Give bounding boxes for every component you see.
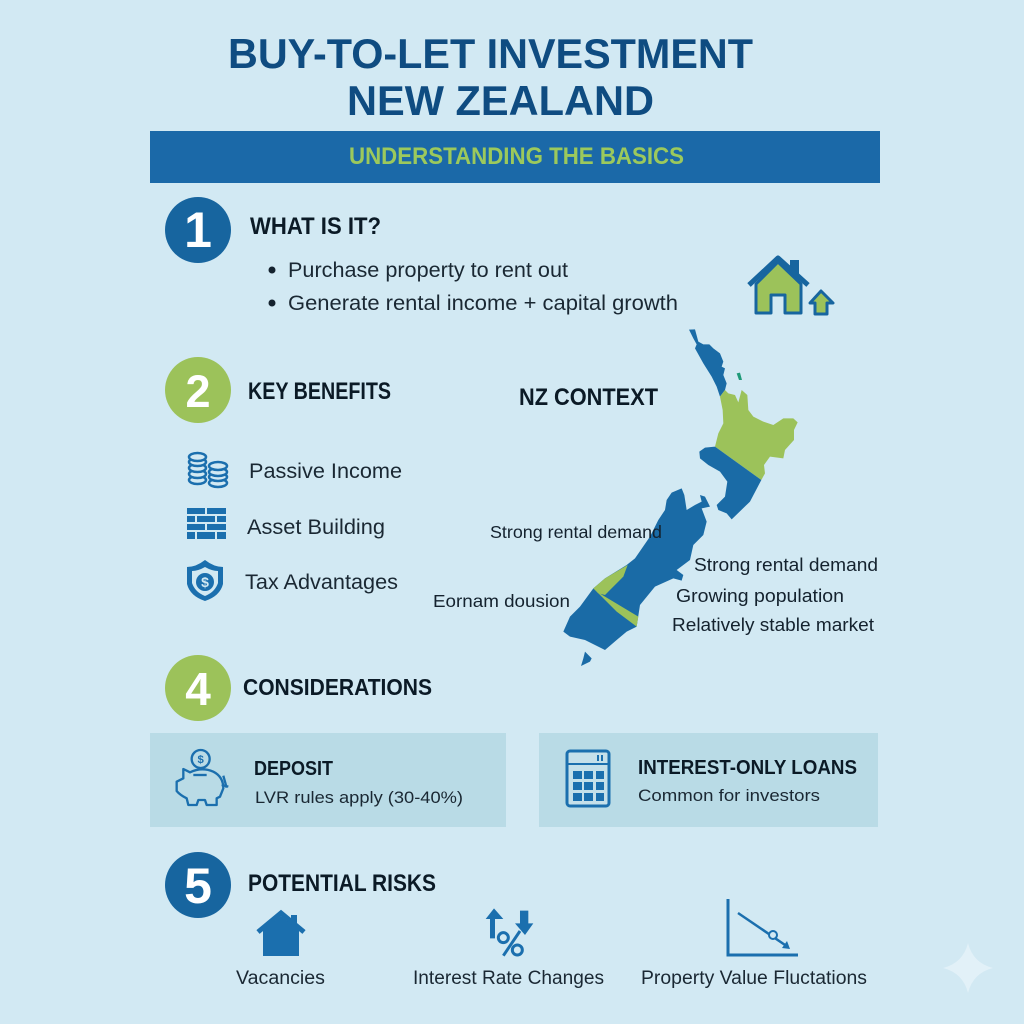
icon: declining line chart <box>728 899 798 955</box>
icon: calculator <box>567 751 609 806</box>
bullet list: Generate rental income + capital growth <box>288 292 678 315</box>
icon: brick wall <box>187 508 226 539</box>
Stewart Island <box>581 652 592 666</box>
benefit: passive income: Passive Income <box>249 460 402 483</box>
icon: house <box>258 913 304 956</box>
heading: NZ context: NZ CONTEXT <box>519 384 658 411</box>
map labels: Eornam dousion <box>433 591 570 611</box>
benefit: asset building: Asset Building <box>247 516 385 539</box>
heading: considerations: CONSIDERATIONS <box>243 674 432 700</box>
benefit: tax advantages <box>187 560 398 601</box>
offshore island <box>737 373 742 380</box>
South Island <box>563 488 710 666</box>
risk: vacancies: Vacancies <box>236 968 325 989</box>
icon: shield with dollar: $ <box>201 574 209 590</box>
heading: potential risks: POTENTIAL RISKS <box>248 870 436 897</box>
benefit: passive income <box>189 453 402 487</box>
South Island main shape <box>563 488 710 650</box>
icon: piggy bank <box>177 750 228 805</box>
map labels: Relatively stable market <box>672 614 874 635</box>
watermark sparkle <box>943 943 993 993</box>
benefit: asset building <box>187 508 385 539</box>
map labels: Growing population <box>676 585 844 606</box>
risk: vacancies <box>236 913 325 989</box>
map labels: Strong rental demand <box>490 522 662 542</box>
heading: what is it: WHAT IS IT? <box>250 213 381 240</box>
number badge 2 <box>165 357 231 423</box>
North Island <box>689 329 798 519</box>
Otago green band <box>597 592 638 627</box>
section 2: key benefits <box>165 357 402 601</box>
number badge 5: 5 <box>184 858 212 914</box>
title <box>228 30 753 124</box>
icon: shield with dollar <box>187 560 223 601</box>
panel: interest-only loans <box>539 733 878 827</box>
West Coast green region <box>593 565 628 595</box>
number badge 1 <box>165 197 231 263</box>
number badge 5 <box>165 852 231 918</box>
section 4: considerations <box>165 655 432 721</box>
section 1: what is it <box>165 197 678 315</box>
risk: property value fluctuations: Property Value Fluctations <box>641 968 867 989</box>
number badge 2: 2 <box>185 366 211 417</box>
subtitle banner: UNDERSTANDING THE BASICS <box>349 143 684 170</box>
icon: arrows and percent <box>486 908 533 956</box>
heading: key benefits: KEY BENEFITS <box>248 378 391 405</box>
map labels: Strong rental demand <box>694 554 878 575</box>
title: NEW ZEALAND <box>347 77 654 124</box>
title: BUY-TO-LET INVESTMENT <box>228 30 753 77</box>
bullet list <box>268 259 678 315</box>
risk: property value fluctuations <box>641 899 867 989</box>
number badge 4 <box>165 655 231 721</box>
icon: coin stacks <box>189 453 227 487</box>
Northland region <box>689 329 727 397</box>
number badge 4: 4 <box>185 663 211 715</box>
icon: house with up arrow <box>749 258 833 314</box>
map: New Zealand <box>563 329 798 666</box>
section 5: potential risks <box>165 852 436 918</box>
bullet list: Purchase property to rent out <box>288 259 568 282</box>
number badge 1: 1 <box>184 202 212 258</box>
risk: interest rate changes: Interest Rate Changes <box>413 968 604 989</box>
text: deposit detail: LVR rules apply (30-40%) <box>255 788 463 807</box>
lower North Island region <box>699 447 761 519</box>
map labels <box>433 522 878 635</box>
text: interest-only detail: Common for investors <box>638 786 820 805</box>
text: interest-only heading: INTEREST-ONLY LOANS <box>638 757 857 779</box>
risk: interest rate changes <box>413 908 604 989</box>
icon: piggy bank: $ <box>198 754 205 766</box>
subtitle banner <box>150 131 880 183</box>
text: deposit heading: DEPOSIT <box>254 758 333 780</box>
benefit: tax advantages: Tax Advantages <box>245 571 398 594</box>
panel: deposit <box>150 733 506 827</box>
Waikato and East Cape region <box>715 390 798 480</box>
